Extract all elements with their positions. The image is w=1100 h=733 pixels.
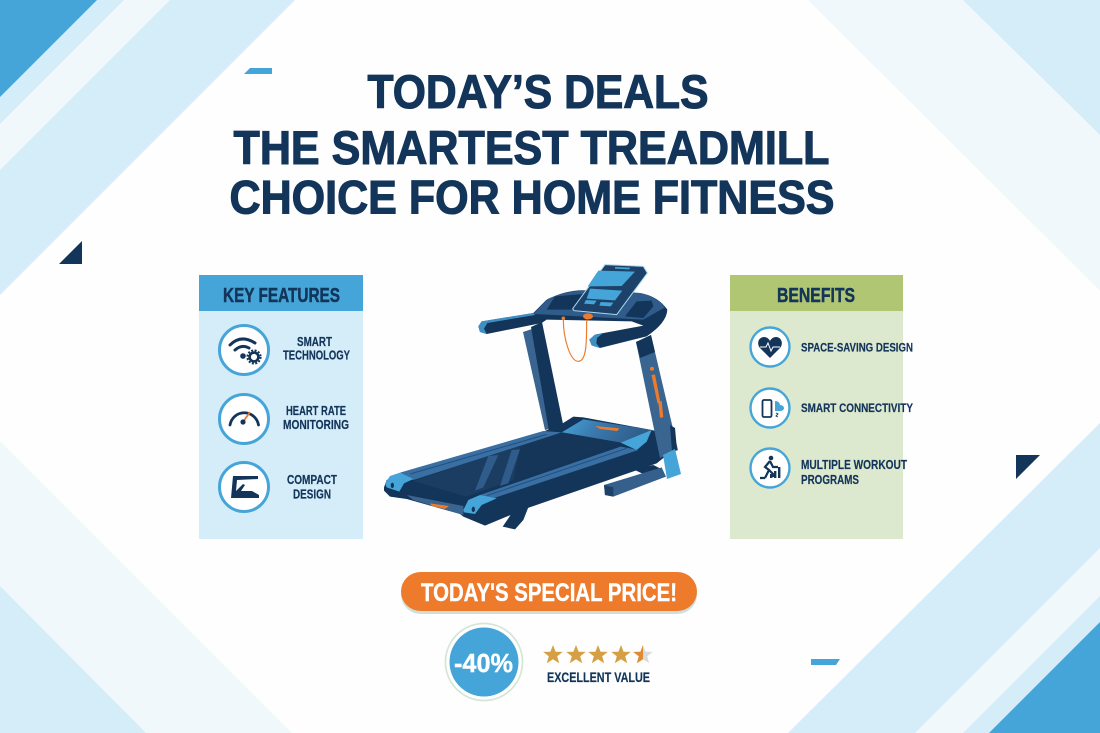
feature: smart technology: TECHNOLOGY bbox=[283, 348, 350, 362]
feature: smart technology bbox=[220, 326, 350, 374]
treadmill illustration bbox=[384, 265, 681, 529]
feature: heart rate monitoring bbox=[220, 394, 349, 444]
console: handlebar bbox=[478, 290, 667, 348]
title bbox=[230, 65, 834, 224]
background: top-right corner stripes bbox=[808, 0, 1100, 291]
title: CHOICE FOR HOME FITNESS bbox=[230, 170, 834, 224]
deck: foot bar bbox=[604, 465, 666, 497]
treadmill: right upright bbox=[636, 335, 681, 479]
benefit: multiple workout programs bbox=[750, 448, 907, 488]
deck: body bbox=[384, 417, 673, 526]
background: bottom-right corner stripes bbox=[788, 423, 1100, 733]
console: safety cord bbox=[561, 313, 593, 361]
accent: left navy triangle bbox=[59, 241, 82, 264]
heading: benefits bbox=[730, 275, 903, 311]
accent: bottom blue dash bbox=[811, 659, 840, 665]
treadmill: left upright bbox=[523, 322, 563, 431]
rating label: EXCELLENT VALUE bbox=[547, 669, 650, 685]
price banner: TODAY'S SPECIAL PRICE! bbox=[421, 579, 677, 607]
accent: right navy triangle bbox=[1016, 455, 1040, 479]
deck: belt bbox=[413, 432, 621, 497]
background: top-left corner stripes bbox=[0, 0, 295, 295]
rating: stars and label bbox=[543, 645, 653, 685]
panel: key features bbox=[199, 275, 363, 539]
heading: key features bbox=[199, 275, 363, 311]
heading: benefits: BENEFITS bbox=[777, 284, 855, 307]
star rating bbox=[543, 645, 653, 663]
benefit: space-saving design: SPACE-SAVING DESIGN bbox=[801, 340, 913, 354]
deck: motor cover bbox=[562, 419, 652, 450]
treadmill: upper console bbox=[478, 265, 667, 361]
discount badge: -40% bbox=[454, 648, 513, 678]
feature: smart technology: SMART bbox=[297, 335, 332, 349]
deck: near rail bbox=[463, 447, 638, 514]
feature: compact design: DESIGN bbox=[293, 488, 331, 502]
discount badge bbox=[446, 624, 522, 700]
treadmill: lower deck bbox=[384, 417, 673, 529]
feature: compact design: COMPACT bbox=[287, 473, 337, 487]
console: screen bbox=[573, 265, 647, 315]
benefit: smart connectivity: SMART CONNECTIVITY bbox=[801, 401, 913, 415]
feature: heart rate monitoring: HEART RATE bbox=[286, 404, 346, 418]
benefit: multiple workout programs: PROGRAMS bbox=[801, 473, 859, 487]
deck: leg bbox=[503, 507, 528, 529]
deck: far rail bbox=[385, 431, 562, 492]
title: THE SMARTEST TREADMILL bbox=[234, 121, 830, 174]
benefit: space-saving design bbox=[750, 328, 913, 366]
price banner bbox=[401, 572, 697, 614]
benefit: multiple workout programs: MULTIPLE WORKOUT bbox=[801, 458, 907, 472]
benefit: smart connectivity bbox=[750, 388, 913, 428]
panel: benefits bbox=[730, 275, 913, 539]
deck: front plate bbox=[407, 495, 463, 515]
background: bottom-left corner stripes bbox=[0, 441, 292, 733]
heading: key features: KEY FEATURES bbox=[223, 284, 340, 307]
feature: heart rate monitoring: MONITORING bbox=[283, 418, 349, 432]
accent: top blue dash bbox=[244, 68, 272, 74]
feature: compact design bbox=[220, 462, 337, 512]
title: TODAY’S DEALS bbox=[368, 65, 708, 118]
